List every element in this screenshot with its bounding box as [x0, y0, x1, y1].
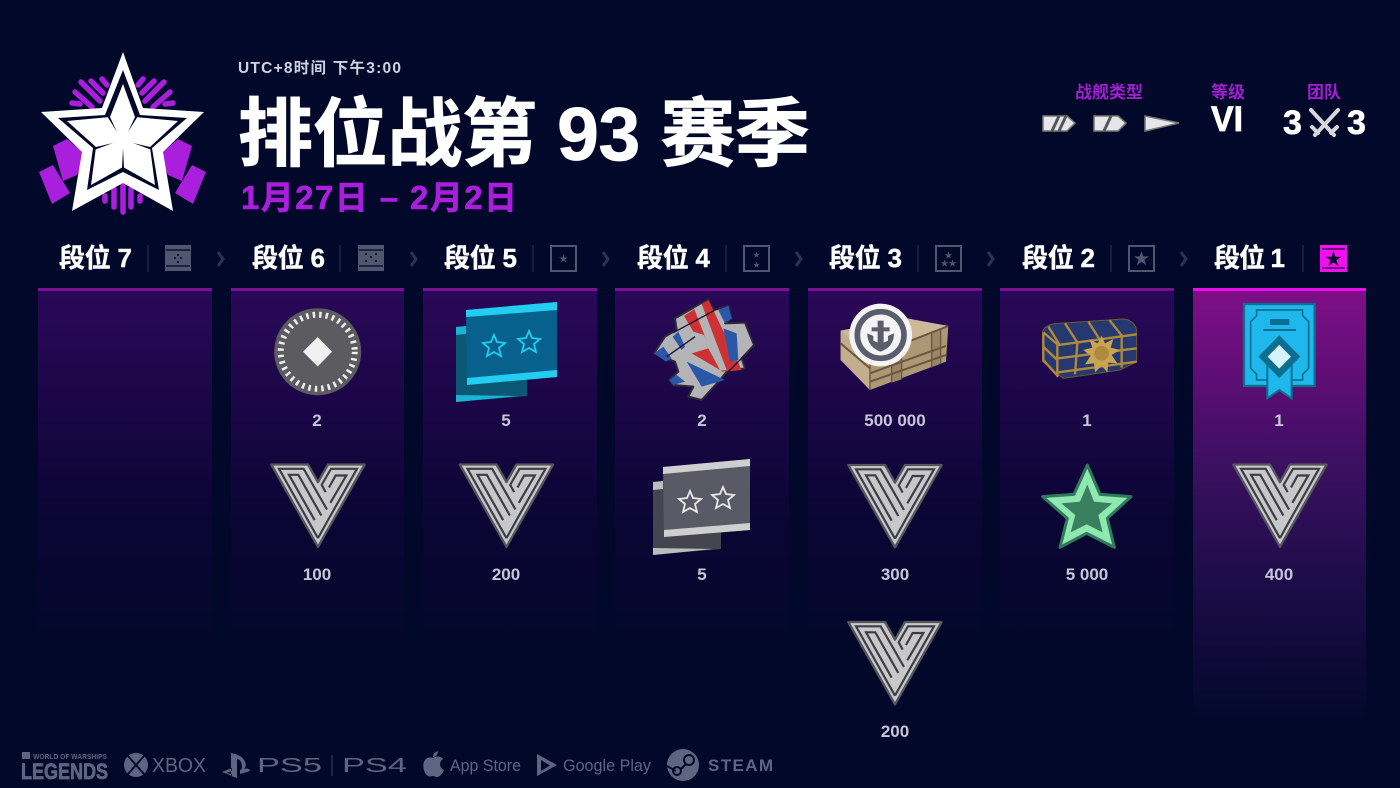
logo: Xbox — [124, 753, 206, 777]
panel: rank 4 — [615, 288, 789, 650]
column 1 — [1193, 243, 1366, 725]
rank 5 heading: 段位 5 — [444, 243, 517, 273]
team size right: 3 — [1347, 104, 1366, 142]
icon: V points — [848, 465, 942, 547]
panel: rank 1 — [1193, 288, 1366, 725]
ship types label: 战舰类型 — [1075, 83, 1143, 102]
icon: rank 5 badge: ★ — [559, 254, 568, 264]
icon: credits crate — [841, 304, 948, 390]
icon: green star — [1043, 465, 1131, 547]
icon: rank 4 badge — [744, 246, 769, 271]
logo: ranked star emblem — [39, 52, 206, 212]
icon: rank 1 badge — [1320, 245, 1347, 272]
value: 1 — [1274, 411, 1284, 430]
tier value: VI — [1211, 100, 1243, 139]
arrow — [603, 252, 608, 266]
icon: rank 1 badge: ★ — [1325, 250, 1342, 269]
icon: rank 5 badge — [551, 246, 576, 271]
logo: Xbox: XBOX — [152, 755, 206, 777]
title: 排位战第 93 赛季 — [238, 92, 810, 176]
logo: World of Warships Legends — [21, 752, 108, 784]
icon: blue signal flag — [456, 302, 557, 402]
panel: rank 6 — [231, 288, 404, 650]
team label: 团队 — [1307, 83, 1341, 102]
icon: rank 3 badge — [936, 246, 961, 271]
value: 500 000 — [864, 411, 926, 430]
value: 5 — [697, 565, 707, 584]
logo: Steam: STEAM — [708, 756, 773, 775]
icon: camouflage — [654, 299, 754, 400]
icon: rank 2 badge — [1129, 246, 1154, 271]
icon: V points — [1233, 464, 1327, 547]
arrow — [988, 252, 993, 266]
team format — [1283, 83, 1366, 142]
value: 1 — [1082, 411, 1092, 430]
footer: platform logos — [21, 749, 773, 784]
panel: rank 2 — [1000, 288, 1174, 650]
date range: 1月27日 – 2月2日 — [241, 179, 517, 216]
icon: rank 7 badge — [165, 245, 191, 271]
value: 400 — [1265, 565, 1293, 584]
column 3 — [808, 243, 982, 741]
arrow — [1181, 252, 1186, 266]
column 6 — [231, 243, 404, 650]
icon: rank 6 badge — [358, 245, 384, 271]
icon: destroyer — [1043, 116, 1075, 131]
icon: rank 3 badge: ★★ — [940, 259, 956, 268]
rank 2 heading: 段位 2 — [1022, 243, 1095, 273]
rank 6 heading: 段位 6 — [252, 243, 325, 273]
ship types — [1043, 83, 1179, 131]
panel: rank 3 — [808, 288, 982, 650]
icon: V points — [460, 464, 553, 547]
logo: Google Play — [537, 754, 651, 776]
icon: V points — [271, 464, 365, 547]
rank 1 heading: 段位 1 — [1214, 243, 1285, 273]
icon: battleship — [1145, 116, 1179, 131]
panel: rank 7 — [38, 288, 212, 650]
value: 100 — [303, 565, 331, 584]
logo: Steam — [667, 749, 773, 781]
icon: rank 4 badge: ★ — [753, 251, 760, 259]
value: 2 — [312, 411, 322, 430]
value: 200 — [492, 565, 520, 584]
logo: PlayStation — [222, 753, 407, 778]
column 2 — [1000, 243, 1174, 650]
icon: rank 2 badge: ★ — [1133, 251, 1150, 268]
logo: App Store — [423, 751, 521, 777]
tier — [1211, 82, 1245, 139]
column 7 — [38, 243, 212, 650]
logo: World of Warships Legends: LEGENDS — [21, 759, 108, 784]
panel: rank 5 — [423, 288, 597, 650]
value: 300 — [881, 565, 909, 584]
arrow — [796, 252, 801, 266]
icon: crossed swords — [1311, 110, 1338, 135]
logo: Google Play: Google Play — [563, 756, 651, 775]
rank 4 heading: 段位 4 — [637, 243, 711, 273]
time note: UTC+8时间 下午3:00 — [238, 58, 401, 77]
logo: World of Warships Legends: WORLD OF WARSHIPS — [33, 752, 107, 761]
arrow — [411, 252, 416, 266]
column 4 — [615, 243, 789, 650]
icon: certificate — [1244, 304, 1315, 398]
tier label: 等级 — [1211, 82, 1245, 102]
column 5 — [423, 243, 597, 650]
icon: treasure chest — [1043, 319, 1137, 378]
value: 200 — [881, 722, 909, 741]
logo: PlayStation: PS4 — [342, 755, 407, 777]
arrow — [218, 252, 223, 266]
value: 2 — [697, 411, 707, 430]
logo: PlayStation: PS5 — [257, 755, 322, 777]
team size left: 3 — [1283, 104, 1302, 142]
icon: rank 4 badge: ★ — [753, 261, 760, 269]
rank 3 heading: 段位 3 — [829, 243, 902, 273]
logo: App Store: App Store — [450, 756, 521, 775]
value: 5 000 — [1066, 565, 1108, 584]
icon: V points extra — [848, 622, 942, 704]
value: 5 — [501, 411, 511, 430]
icon: signal medal — [274, 308, 361, 395]
icon: cruiser — [1094, 116, 1126, 131]
icon: rank 3 badge: ★ — [944, 251, 952, 260]
icon: grey signal flag — [653, 459, 750, 555]
rank 7 heading: 段位 7 — [59, 243, 132, 273]
